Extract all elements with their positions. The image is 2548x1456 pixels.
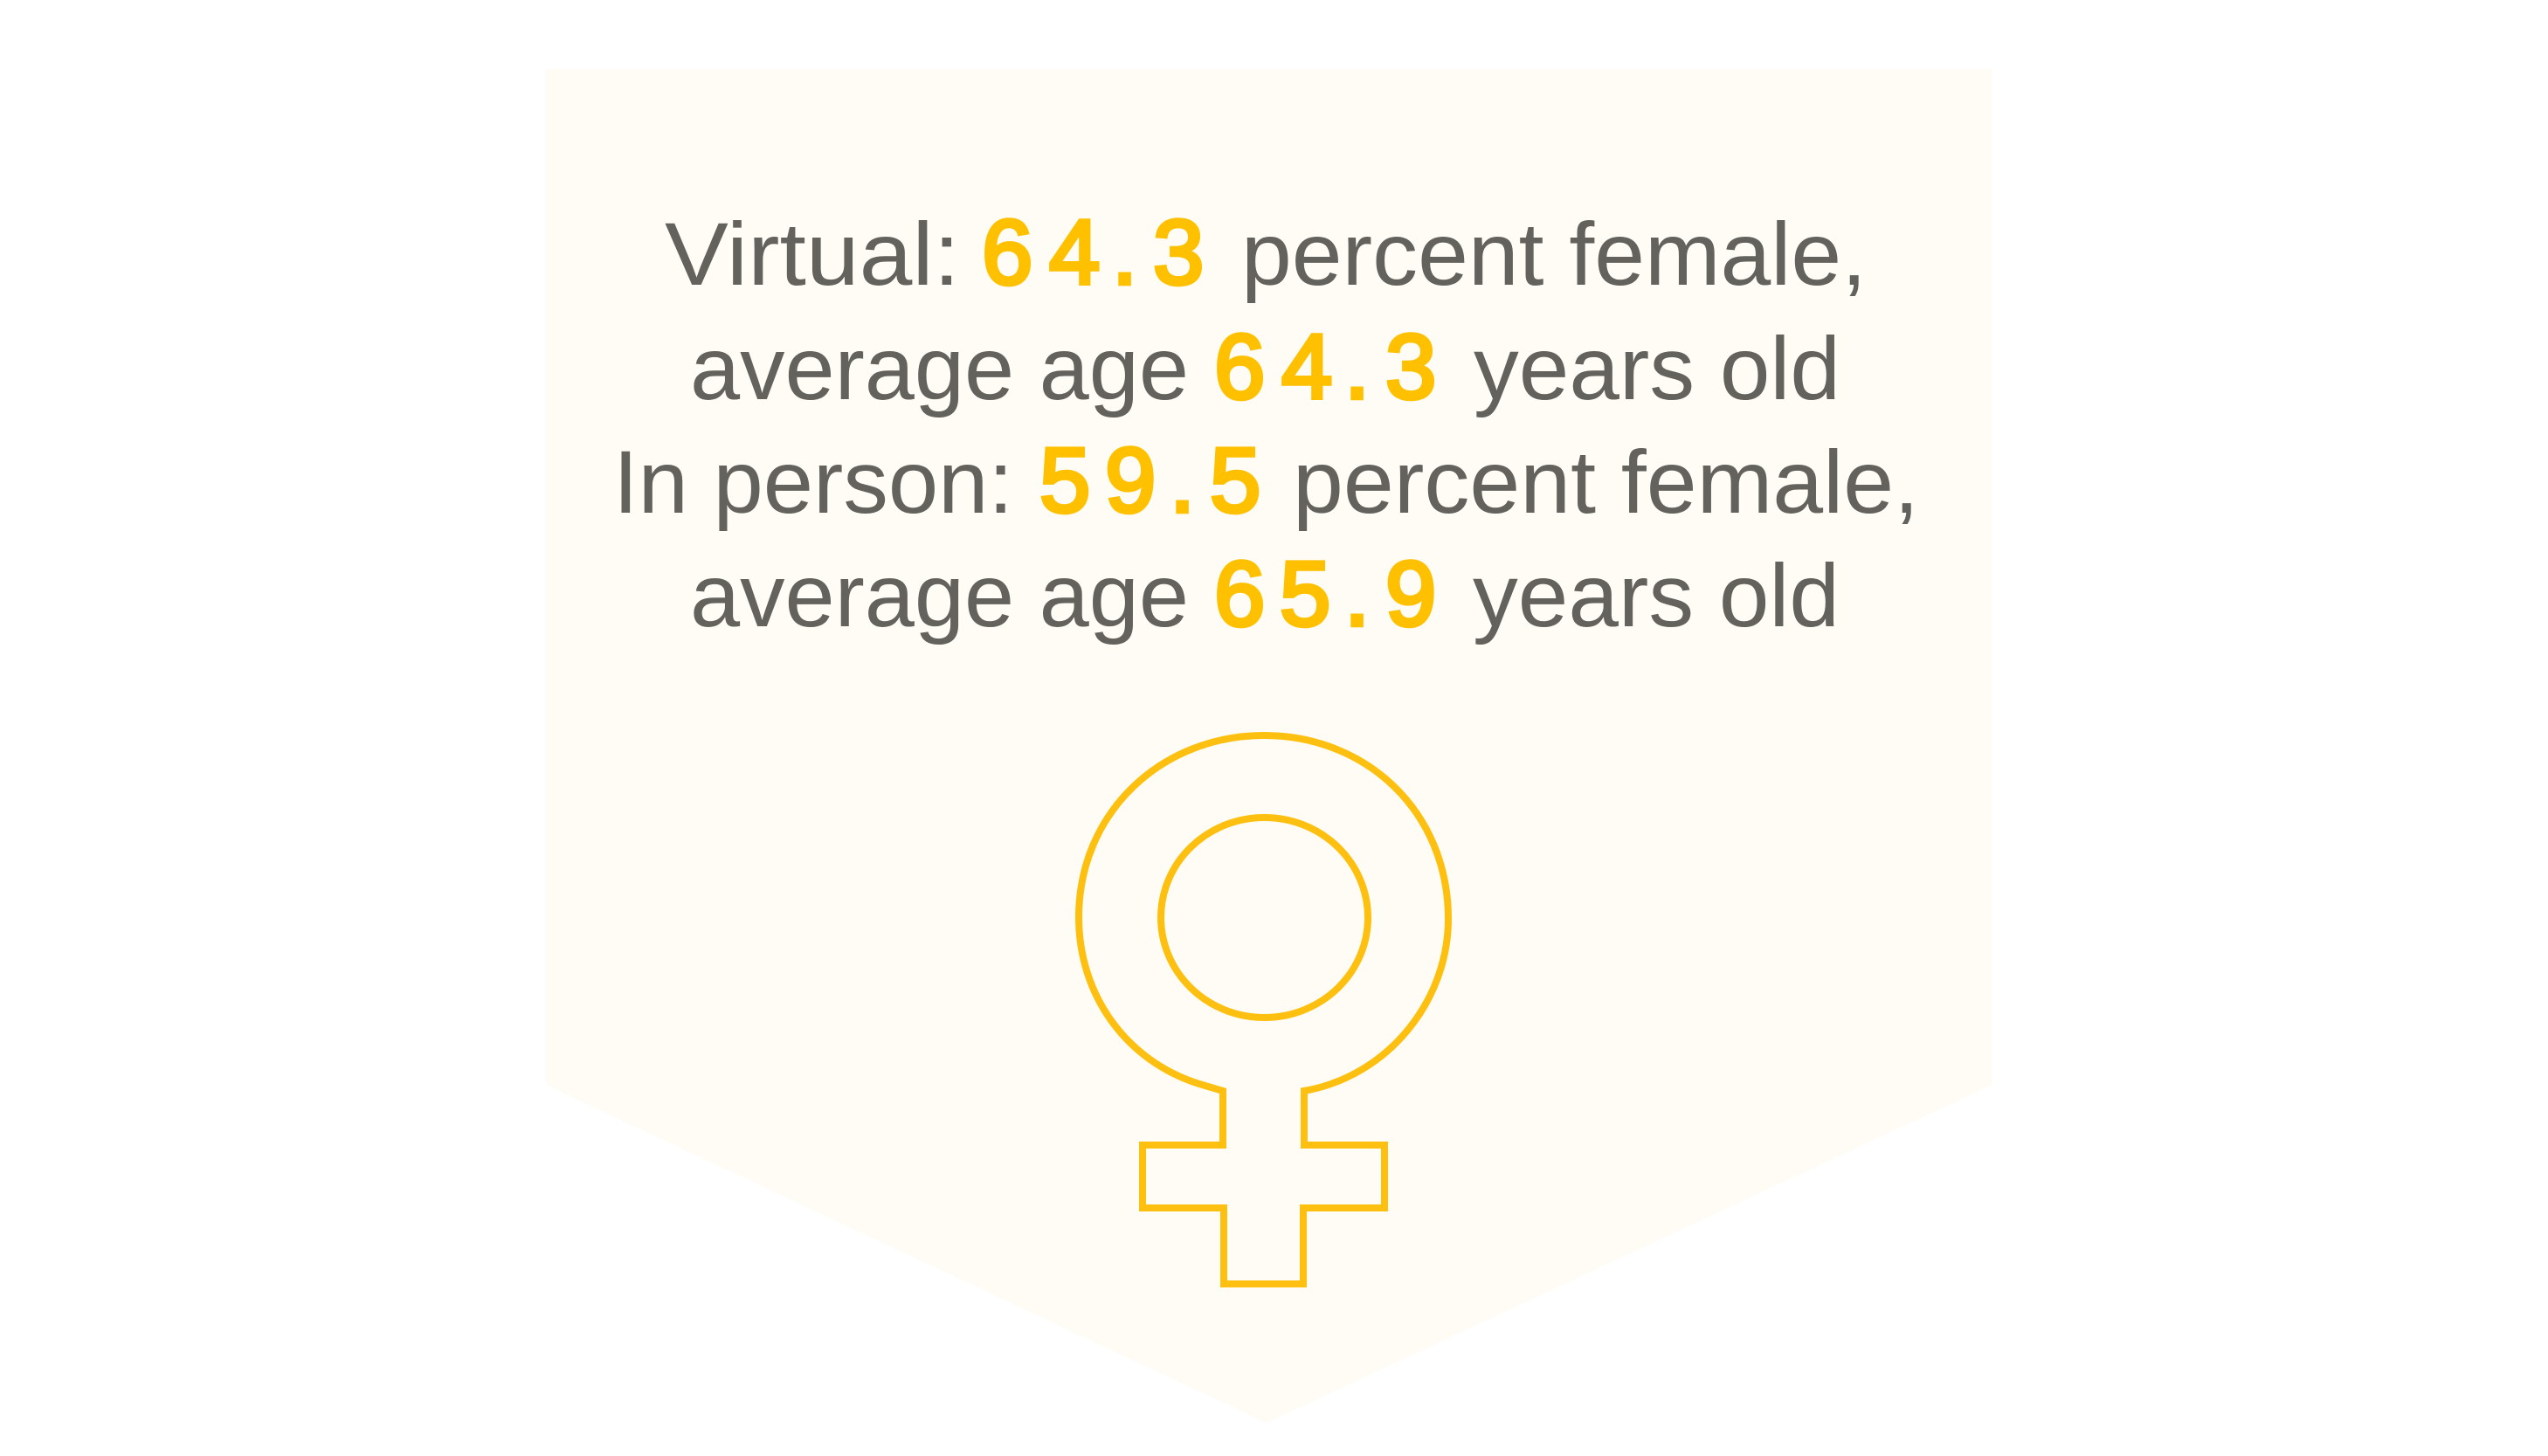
line 4: in-person average age: average age	[690, 546, 1189, 645]
line 4: in-person average age	[690, 543, 1840, 645]
line 1: virtual percent female	[665, 202, 1867, 304]
line 1: virtual percent female: 64.3	[982, 202, 1204, 304]
line 1: virtual percent female: Virtual:	[665, 204, 960, 304]
line 3: in-person percent female: percent female,	[1293, 432, 1919, 532]
panel: pennant background	[546, 69, 1992, 1423]
line 3: in-person percent female	[613, 430, 1919, 532]
line 3: in-person percent female: 59.5	[1039, 430, 1260, 532]
line 2: virtual average age: years old	[1474, 319, 1840, 418]
line 3: in-person percent female: In person:	[613, 432, 1013, 532]
line 2: virtual average age	[690, 316, 1840, 418]
text block: virtual and in-person statistics	[613, 202, 1919, 645]
line 4: in-person average age: 65.9	[1214, 543, 1436, 645]
line 2: virtual average age: average age	[690, 319, 1189, 418]
line 4: in-person average age: years old	[1473, 546, 1840, 645]
line 1: virtual percent female: percent female,	[1241, 204, 1867, 304]
icon: female symbol outline	[1079, 735, 1448, 1284]
line 2: virtual average age: 64.3	[1214, 316, 1436, 418]
